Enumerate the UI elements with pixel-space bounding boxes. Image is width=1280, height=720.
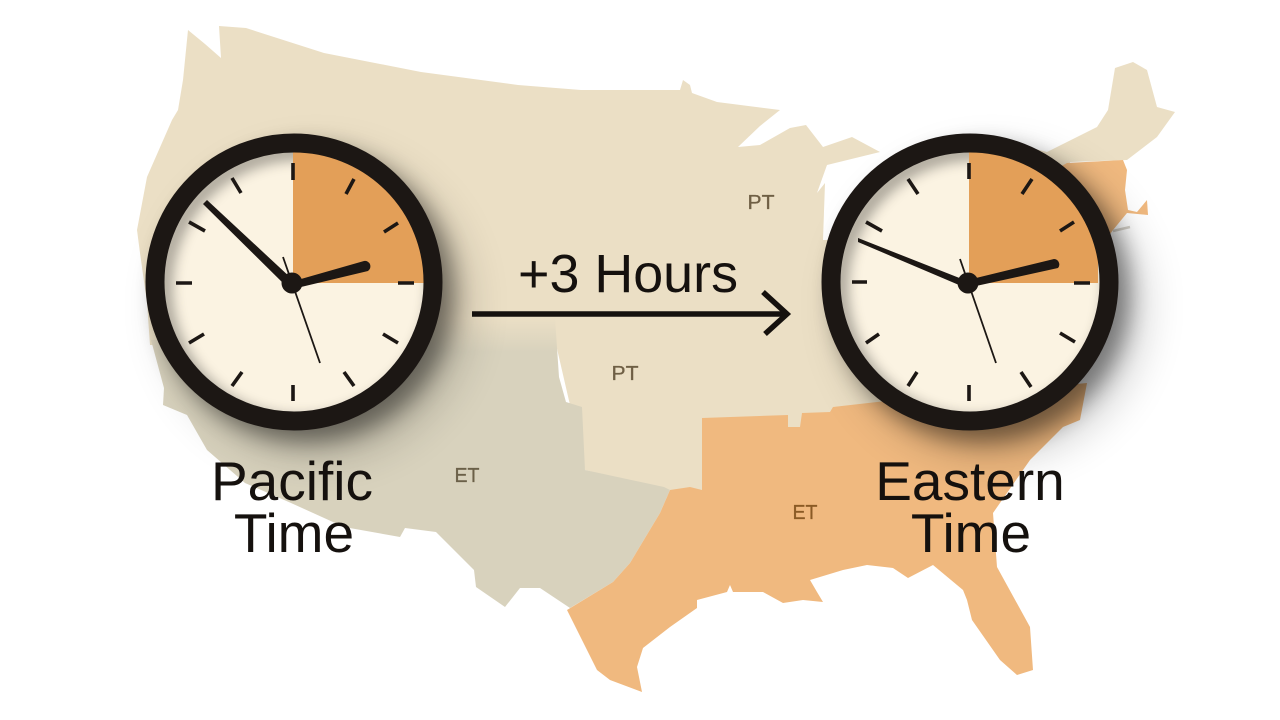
map region: southwest, grey [151,318,670,608]
map region: northeast, orange [1000,160,1148,262]
map label: PT lower: PT [612,363,638,385]
map label: ET west: ET [454,465,480,487]
map region: southeast, orange [567,383,1087,692]
map label: ET south: ET [792,502,818,524]
hour ticks [176,163,414,401]
heading: +3 Hours: +3 Hours [518,244,738,304]
infographic [137,26,1175,692]
arrow [472,292,787,334]
elapsed quarter wedge [969,150,1098,283]
clock hands [858,238,1059,363]
map label: PT upper: PT [748,192,774,214]
coast line mark [1113,227,1130,231]
map of the United States [137,26,1175,692]
clock hands [203,200,370,363]
label: Eastern Time: Eastern [875,450,1065,512]
elapsed quarter wedge [293,150,426,283]
clock: Eastern Time [831,143,1142,456]
label: Eastern Time: Time [911,502,1031,564]
label: Pacific Time: Time [234,502,354,564]
label: Pacific Time: Pacific [211,450,373,512]
clock: Pacific Time [155,143,466,456]
map region: north and central, beige [137,26,1175,490]
hour ticks [852,163,1090,401]
